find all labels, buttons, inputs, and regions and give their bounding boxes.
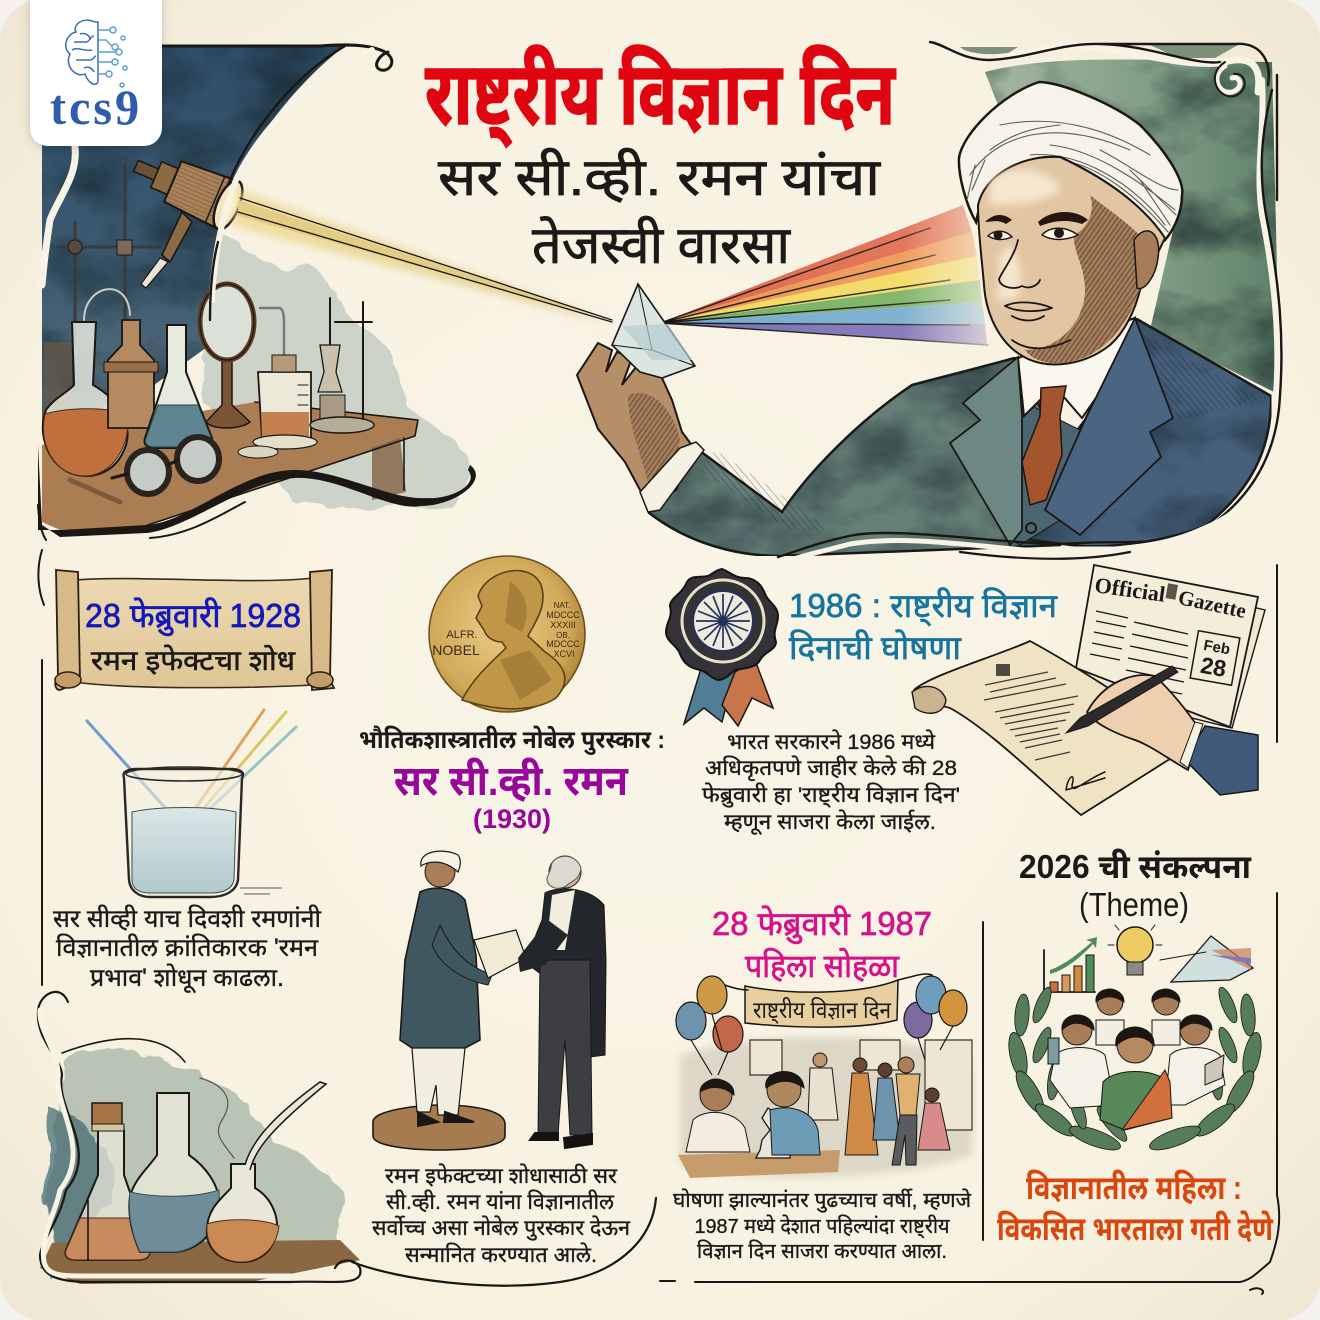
portrait frame [778,42,1281,560]
scroll date heading: 28 फेब्रुवारी 1928 [85,596,301,636]
text: first celebration: 1987 मध्ये देशात पहिल्यांदा राष्ट्रीय [694,1214,951,1239]
lapel left [950,357,1022,545]
icon: wax seal with ashoka chakra and ribbons [666,569,778,726]
official gazette newspaper: Gazette [1176,585,1248,623]
panel: portrait background [960,45,1280,395]
nobel year: (1930) [473,804,551,834]
gazette date box [1190,631,1240,685]
presenter figure: shirt [546,890,575,950]
suit shoulder hatching [1130,330,1262,420]
nobel heading [359,725,665,834]
lab stand rods [58,165,160,345]
rainbow spectrum [660,205,988,345]
raman figure: turban [421,851,460,872]
hand writing with pen [1066,666,1258,795]
1986 heading [789,587,1058,666]
green wash [48,1050,339,1270]
theme title [997,1169,1274,1247]
text: nobel citation: सी.व्ही. रमन यांना विज्ञानातील [386,1189,615,1214]
suit button [1026,523,1036,533]
document lines [984,672,1078,760]
lightbulb icon [1108,925,1162,975]
signature [1066,772,1105,790]
medal bust shading [500,582,552,700]
face highlights [990,170,1060,300]
center-right divider [982,922,984,1240]
suit left side [648,357,1090,556]
table with microscope [678,1108,840,1178]
magnifying glass on stand [200,284,254,428]
dark blue wall [42,46,345,430]
pyramid prism icon [1160,936,1253,982]
text: nobel citation: रमन इफेक्टच्या शोधासाठी सर [385,1162,618,1188]
text: nobel citation: सर्वोच्च असा नोबेल पुरस्कार देऊन [372,1214,631,1242]
presenter figure: hair and beard [547,856,581,888]
2026 theme heading: 2026 ची संकल्पना [1019,848,1252,885]
stoppered bottle [66,1103,150,1260]
right upper divider [1276,565,1278,742]
panel frame swirl [38,45,476,540]
1986 heading: दिनाची घोषणा [789,629,962,666]
banner [712,974,932,1027]
text: 1986 announcement: भारत सरकारने 1986 मध्ये [727,728,936,754]
turban folds [967,121,1178,232]
raman figure: shoes [418,1112,474,1126]
growth chart icon [1044,937,1097,992]
gazette date box: Feb [1202,637,1231,658]
signed declaration document [912,641,1192,815]
text: raman effect discovery: विज्ञानातील क्रांतिकारक 'रमन [56,933,319,962]
first celebration illustration [676,974,972,1178]
lapel right [1045,318,1173,535]
raman name: सर सी.व्ही. रमन [394,757,629,804]
shirt collar [1018,318,1135,418]
sleeve hatching [700,450,830,530]
presenter figure: head [549,856,581,888]
text: first celebration [673,1188,972,1263]
panel: chemistry glassware bottom left [38,992,360,1284]
gazette masthead: Official [1093,572,1167,607]
wooden table [40,1240,360,1284]
medal inscriptions: NOBEL [432,642,480,658]
erlenmeyer flask with blue liquid [144,325,212,448]
nobel medal [429,556,585,712]
background wash [680,1037,972,1177]
eyes and brows [985,212,1088,240]
bottom swoosh rule [352,1198,656,1286]
standing visitors [808,1053,950,1165]
banner: राष्ट्रीय विज्ञान दिन [753,997,892,1024]
right lower divider and page flourish [660,893,1279,1294]
medal inscriptions: MDCCC [546,639,580,649]
medal inscriptions: OB. [556,631,570,640]
scientist left [1048,1015,1115,1108]
shirt cuff [640,442,704,512]
scroll frame [38,992,360,1282]
title: राष्ट्रीय विज्ञान दिन [425,44,896,148]
medal inscriptions: ALFR. [446,629,478,641]
goggles [112,437,219,494]
nose and mouth [999,240,1070,348]
steam [200,1078,234,1158]
seal body [666,569,778,680]
text: 1986 announcement [702,728,960,836]
left divider line [38,550,44,985]
small orange flask [207,1082,326,1262]
ear [1134,231,1159,289]
subtitle: तेजस्वी वारसा [532,216,792,275]
boy student [766,1071,820,1155]
medal inscriptions: NAT. [554,601,570,610]
suit cuff [1185,726,1258,795]
subtitle [438,149,882,275]
subtitle: सर सी.व्ही. रमन यांचा [438,149,882,207]
text: 1986 announcement: अधिकृतपणे जाहीर केले की 28 [705,754,957,782]
balloons [676,976,967,1075]
light rays [87,710,296,822]
scroll subtitle: रमन इफेक्टचा शोध [91,644,296,676]
palm shading [628,393,680,490]
theme emblem: women in science [1005,925,1265,1155]
presenter figure: trousers [538,960,592,1135]
text: nobel citation [372,1162,631,1267]
grey watercolor wash [200,235,470,508]
suit right side [1025,318,1271,546]
light beam into prism [232,190,618,325]
raman figure: arm [432,925,492,985]
presenter figure: arm [518,920,568,972]
medal inscriptions: XCVI [553,649,575,659]
presenter figure: tailcoat [525,889,606,1057]
blue round flask [129,1093,219,1252]
medal portrait bust [462,571,565,709]
exhibit boards [750,1040,972,1130]
gazette columns [1090,611,1188,694]
nobel heading: भौतिकशास्त्रातील नोबेल पुरस्कार : [359,725,665,755]
raman figure: dhoti [412,1048,465,1115]
1987 heading: 28 फेब्रुवारी 1987 [712,904,932,944]
neck shading [1030,310,1130,385]
official gazette newspaper [1076,565,1265,728]
logo card [30,0,162,146]
1987 heading [712,904,932,984]
retort stand with glassware [310,298,374,433]
round flask with orange liquid [43,289,130,476]
face [978,157,1165,364]
medal inscriptions [432,601,580,659]
text: raman effect discovery [53,904,322,993]
hand holding prism [577,343,694,505]
chakra spokes [696,594,750,648]
rear scientists [1096,989,1180,1045]
nobel award handshake illustration [373,851,606,1150]
text: 1986 announcement: फेब्रुवारी हा 'राष्ट्रीय विज्ञान दिन' [702,781,960,809]
lab table [42,342,418,530]
text: raman effect discovery: प्रभाव' शोधून काढला. [90,963,284,993]
face shading [1025,195,1150,363]
2026 theme heading: (Theme) [1079,886,1189,923]
scientist right [1165,1015,1225,1105]
girl student [686,1079,750,1152]
text: first celebration: घोषणा झाल्यानंतर पुढच्याच वर्षी, म्हणजे [673,1188,972,1213]
brass microscope tube [126,142,248,288]
scroll banner: 28 Feb 1928 [55,570,334,690]
laurel wreath [1005,985,1265,1155]
ribbons [684,662,735,724]
brown stoppered bottle [104,320,158,428]
woman in saree [1100,1027,1172,1130]
raman figure: coat [400,888,480,1050]
text: nobel citation: सन्मानित करण्यात आले. [405,1241,597,1267]
1987 heading: पहिला सोहळा [745,948,900,984]
glass prism [612,284,695,378]
document emblem [996,664,1010,676]
pencil and dish [70,446,278,502]
gazette emblem [1166,583,1178,600]
plinth [373,1105,505,1150]
text: 1986 announcement: म्हणून साजरा केला जाईल. [724,808,936,836]
dark teal wash [48,1105,117,1280]
necktie [1022,386,1066,505]
text: first celebration: विज्ञान दिन साजरा करण्यात आला. [697,1239,947,1263]
2026 theme heading [1019,848,1252,923]
icon: brain circuit [66,20,127,87]
medal inscriptions: XXXIII [550,620,576,630]
1986 heading: 1986 : राष्ट्रीय विज्ञान [789,587,1058,626]
waistcoat [1000,400,1080,545]
graduated beaker [253,308,317,449]
certificate [474,930,526,978]
theme title: विज्ञानातील महिला : [1026,1169,1242,1206]
medal inscriptions: MDCCC [546,610,580,620]
presenter figure: shoes [530,1133,592,1148]
raman figure: head [425,857,455,887]
logo wordmark: tcs9 [50,79,142,135]
panel: laboratory scene top left [38,45,476,540]
panel: sir c.v. raman portrait [577,82,1271,556]
beaker with light rays [87,710,296,897]
turban [959,82,1182,240]
text: raman effect discovery: सर सीव्ही याच दिवशी रमणांनी [53,904,322,933]
gazette date box: 28 [1199,652,1228,682]
